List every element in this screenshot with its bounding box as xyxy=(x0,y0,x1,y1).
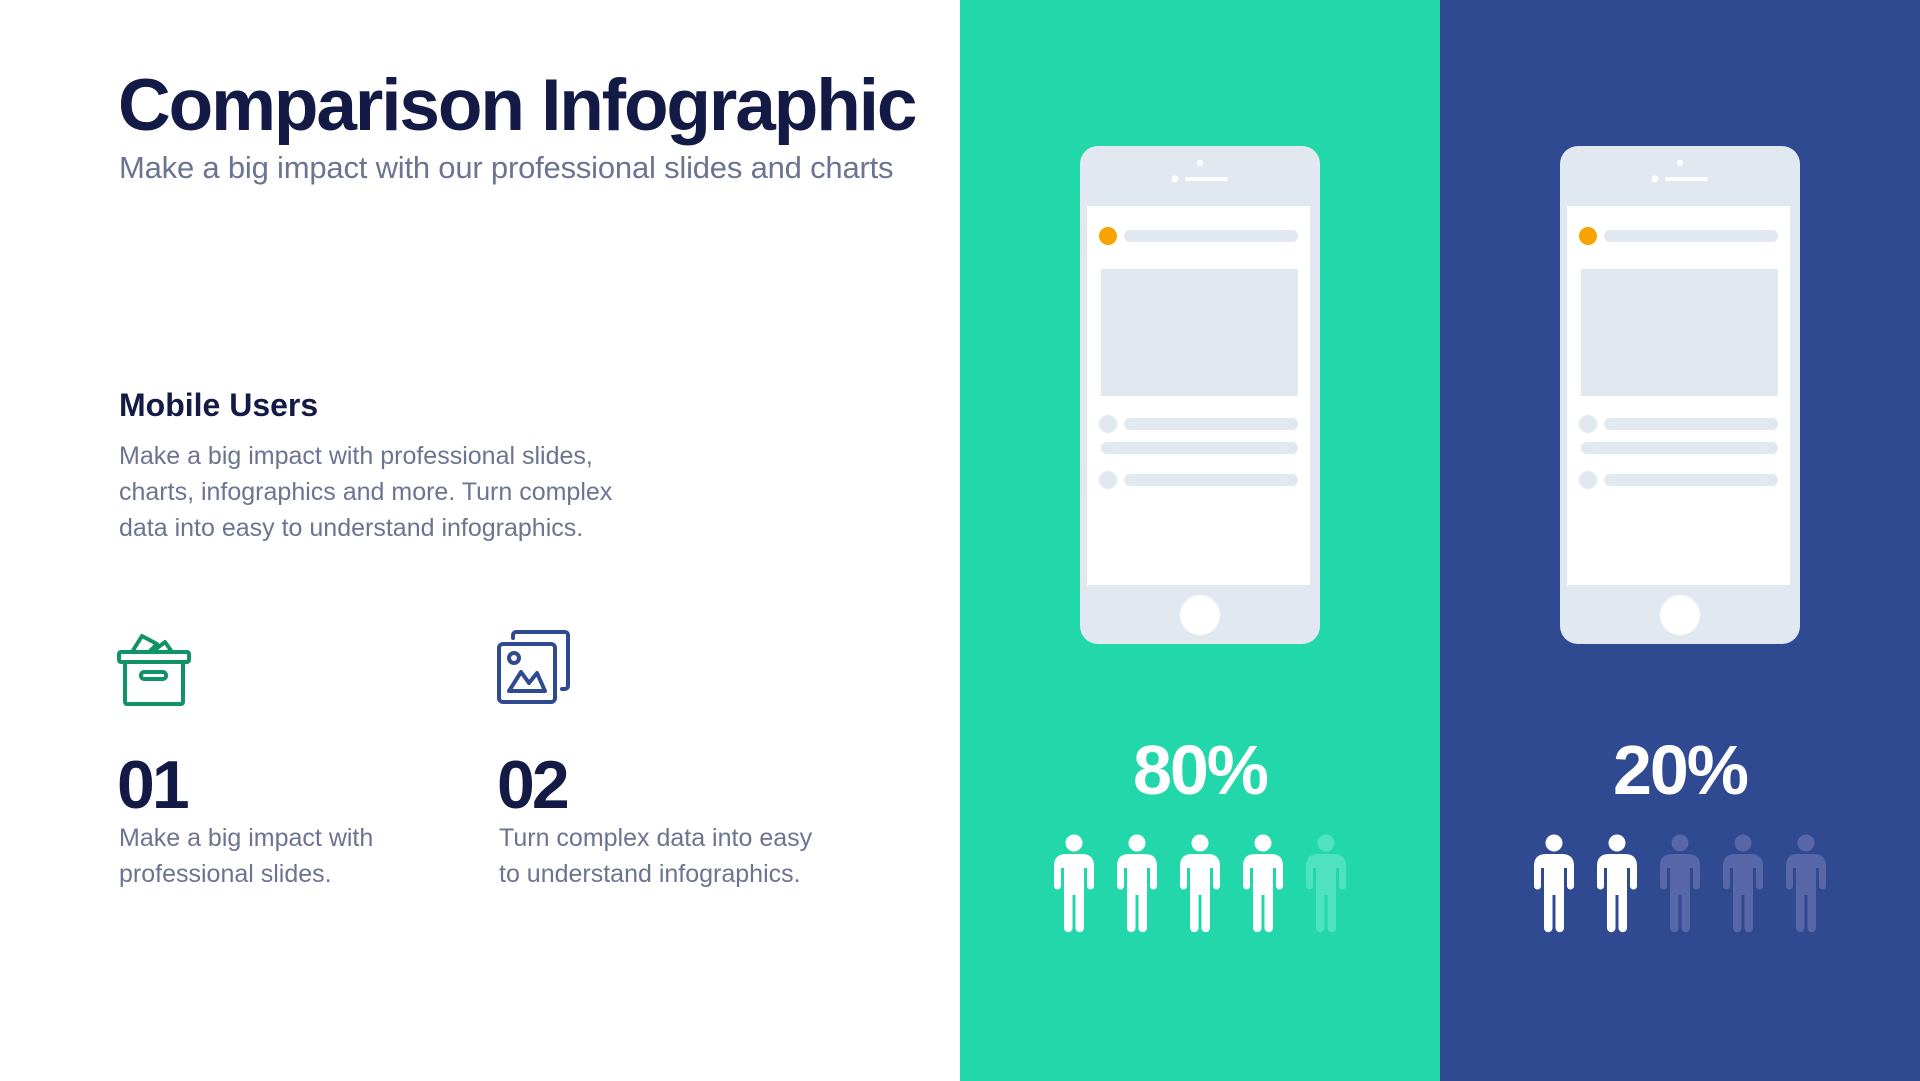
number 02: 02 xyxy=(497,747,567,823)
people icons xyxy=(1054,834,1346,932)
icon: image gallery xyxy=(497,630,570,704)
people icons xyxy=(1534,834,1826,932)
percentage 80%: 80% xyxy=(1133,731,1267,809)
text: item 2: Turn complex data into easy to understand infographics. xyxy=(499,824,812,888)
heading: mobile users: Mobile Users xyxy=(119,387,318,423)
text block: description: Make a big impact with professional slides, charts, infographics and more. Turn complex data into easy to understand infographics. xyxy=(119,442,612,542)
panel: blue 20% xyxy=(1440,0,1920,1081)
percentage 20%: 20% xyxy=(1613,731,1747,809)
subtitle: Make a big impact with our professional slides and charts xyxy=(119,150,893,185)
icon: archive box xyxy=(117,634,191,706)
panel: green 80% xyxy=(960,0,1440,1081)
phone mockup xyxy=(1080,146,1320,644)
title: Comparison Infographic xyxy=(118,65,915,146)
text: item 1: Make a big impact with professional slides. xyxy=(119,824,373,888)
number 01: 01 xyxy=(117,747,187,823)
phone mockup xyxy=(1560,146,1800,644)
